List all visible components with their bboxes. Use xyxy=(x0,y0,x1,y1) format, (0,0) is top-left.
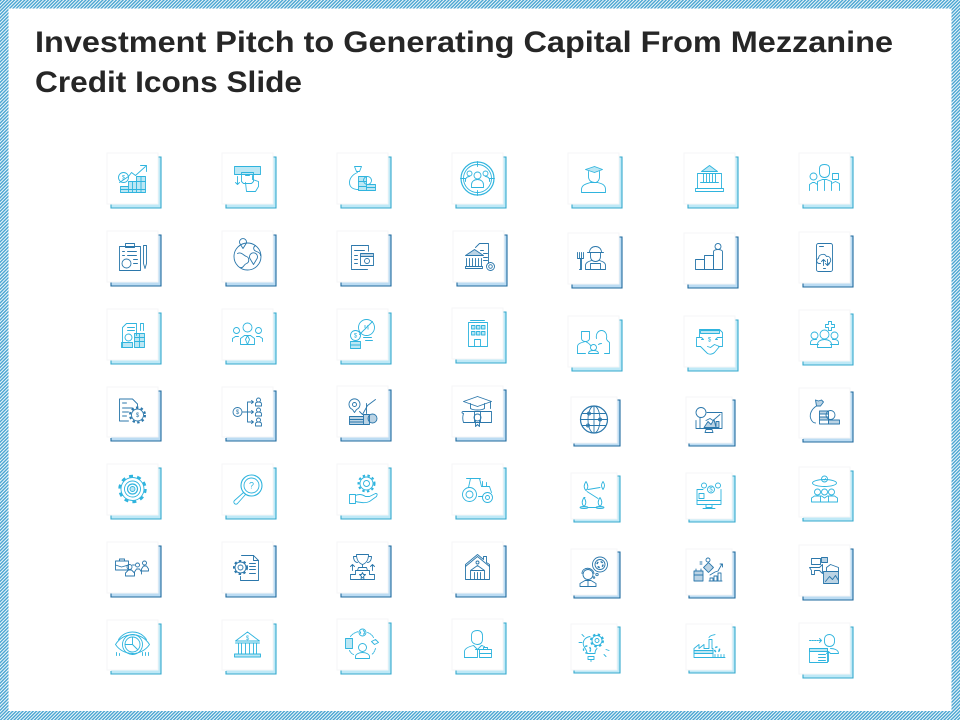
tile: handshake xyxy=(684,316,738,371)
icon: world globe xyxy=(580,406,608,433)
tile: online bank laptop xyxy=(684,153,738,208)
icon: add group xyxy=(810,322,838,348)
icon: eye chart xyxy=(116,632,150,656)
tile: graduate xyxy=(568,153,622,208)
tile: trophy podium xyxy=(337,542,391,597)
icon: businessman xyxy=(464,630,492,658)
icon: office building xyxy=(468,320,488,346)
icon: team of three xyxy=(810,164,840,190)
icon: diploma and cap xyxy=(462,396,492,426)
icon: person and board xyxy=(810,634,838,662)
icon: search question: ? xyxy=(249,480,254,490)
tile: eye chart xyxy=(107,620,161,674)
icon: business charts xyxy=(694,558,722,581)
icon: factory xyxy=(694,634,725,658)
icon: globe with pins xyxy=(234,239,261,270)
icon: monitor coins: $ xyxy=(709,488,713,494)
tile: dollar flow to people xyxy=(222,387,276,441)
tile: business team xyxy=(107,542,161,597)
icon: coin bag stack xyxy=(810,400,840,424)
tile: businessman xyxy=(452,619,506,674)
tile: meeting xyxy=(799,467,853,521)
tile: step bars with person xyxy=(684,233,738,288)
icon: online bank laptop xyxy=(696,166,724,192)
icon: hand and gear xyxy=(350,476,377,504)
tile: world globe xyxy=(571,397,620,446)
tile: target audience xyxy=(452,153,506,208)
icon: clipboard xyxy=(120,244,146,270)
tile: family xyxy=(568,316,622,371)
tile: thinking person xyxy=(571,549,620,598)
tile: phone cloud xyxy=(799,232,853,287)
tile: diploma and cap xyxy=(452,386,506,441)
icon: finance documents xyxy=(122,324,144,348)
icon: chart analysis xyxy=(696,408,722,432)
icon: coins and percent: $ xyxy=(354,334,358,340)
icon: target audience xyxy=(460,162,494,196)
title xyxy=(35,26,893,99)
tile: receipt and bill xyxy=(337,231,391,286)
tile: hand and gear xyxy=(337,464,391,519)
icon: step bars with person xyxy=(696,244,722,270)
title: Investment Pitch to Generating Capital From Mezzanine xyxy=(35,26,893,59)
icon: meeting xyxy=(812,476,838,502)
tile: team of three xyxy=(799,153,853,208)
tile: business charts xyxy=(686,549,735,598)
icon: graduate xyxy=(582,166,606,192)
icon: barn xyxy=(466,554,490,580)
tile: bank building xyxy=(222,620,276,674)
tile: document and gear xyxy=(107,387,161,441)
tile: add group xyxy=(799,310,853,365)
icon: coins and percent: % xyxy=(364,326,370,332)
icon: growth chart: $ xyxy=(122,176,126,182)
tile: person and board xyxy=(799,623,853,678)
tile: clipboard xyxy=(107,231,161,286)
tile: finance documents xyxy=(107,309,161,364)
icon: tractor xyxy=(462,478,492,502)
tile: investor returns xyxy=(337,386,391,441)
tile: coin bag stack xyxy=(799,388,853,442)
icon: business team xyxy=(116,559,148,576)
tile: globe with pins xyxy=(222,231,276,286)
tile: monitor coins xyxy=(686,473,735,522)
icon: handshake: $ xyxy=(708,338,712,344)
icon: investor returns xyxy=(349,399,377,424)
tile: ATM withdrawal xyxy=(222,153,276,208)
tile: idea gear bulb xyxy=(571,624,620,673)
tile: money bag xyxy=(337,153,391,208)
icon: bank document xyxy=(466,244,494,270)
icon: bank building: $ xyxy=(246,636,250,642)
icon: thinking person xyxy=(580,557,608,586)
tile: coins and percent xyxy=(337,309,391,364)
icon: ATM withdrawal xyxy=(234,166,260,192)
icon: coins and percent xyxy=(350,320,374,348)
icon: idea gear bulb xyxy=(579,634,609,662)
tile: gear target xyxy=(107,464,161,519)
tile: chart analysis xyxy=(686,397,735,446)
icon: location network xyxy=(580,482,604,508)
tile: location network xyxy=(571,473,620,522)
tile: factory xyxy=(686,624,735,673)
icon: money bag xyxy=(350,166,376,190)
tile: search question xyxy=(222,464,276,519)
icon: customer cycle xyxy=(346,629,378,658)
icon: three employees xyxy=(232,323,262,344)
tile: barn xyxy=(452,542,506,597)
tile: growth chart xyxy=(107,153,161,208)
tile: customer cycle xyxy=(337,619,391,674)
icon: phone cloud xyxy=(816,244,832,272)
icon: gear target xyxy=(120,476,146,502)
tile: farmer xyxy=(568,233,622,288)
tile: bank document xyxy=(453,231,507,286)
title: Credit Icons Slide xyxy=(35,66,302,99)
icon: farmer xyxy=(578,246,606,270)
icon: gear and paper xyxy=(234,556,258,580)
icon: document and gear: $ xyxy=(136,413,140,419)
icon: family xyxy=(578,330,610,354)
icon: receipt and bill xyxy=(352,246,374,270)
tile: three employees xyxy=(222,309,276,364)
icon: dollar flow to people: $ xyxy=(236,410,240,416)
icon: trophy podium xyxy=(350,554,374,580)
tile: tractor xyxy=(452,464,506,519)
tile: office building xyxy=(452,308,506,363)
tile: gear and paper xyxy=(222,542,276,597)
tile: marketing xyxy=(799,545,853,600)
icon: marketing xyxy=(810,558,838,584)
